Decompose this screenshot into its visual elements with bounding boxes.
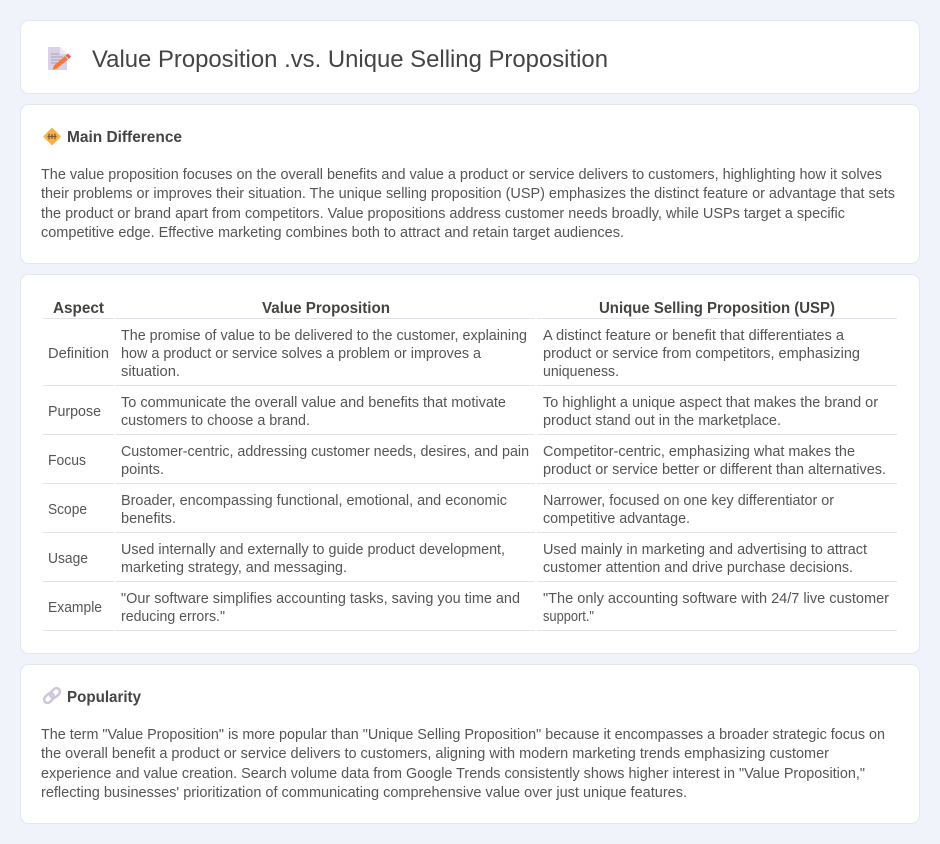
row: scope: Scope bbox=[48, 502, 87, 518]
text block: popularity: experience and value creation. Search volume data from Google Trends consistently shows higher interest in "Value Proposition," bbox=[41, 766, 865, 782]
row: focus: Customer-centric, addressing customer needs, desires, and pain bbox=[121, 444, 529, 460]
row: definition: how a product or service solves a problem or improves a bbox=[121, 346, 481, 362]
row: example: "The only accounting software with 24/7 live customer bbox=[543, 591, 889, 607]
row: focus: product or service better or different than alternatives. bbox=[543, 462, 886, 478]
icon: orange diamond sign bbox=[44, 128, 60, 144]
table header row: Unique Selling Proposition (USP) bbox=[599, 300, 835, 317]
row: scope: Broader, encompassing functional, emotional, and economic bbox=[121, 493, 507, 509]
row: example: support." bbox=[543, 609, 594, 625]
row: usage: marketing strategy, and messaging. bbox=[121, 560, 347, 576]
row: focus bbox=[48, 444, 886, 478]
row: definition: The promise of value to be delivered to the customer, explaining bbox=[121, 328, 527, 344]
text block: main difference bbox=[41, 167, 895, 241]
text block: main difference: The value proposition focuses on the overall benefits and value a product or service delivers to customers, highlighting how it solves bbox=[41, 167, 882, 183]
row: focus: points. bbox=[121, 462, 164, 478]
row: focus: Competitor-centric, emphasizing what makes the bbox=[543, 444, 855, 460]
heading: popularity: Popularity bbox=[67, 689, 141, 706]
row: definition: uniqueness. bbox=[543, 364, 619, 380]
row: purpose: customers to choose a brand. bbox=[121, 413, 310, 429]
table header row bbox=[53, 300, 835, 317]
row: scope: Narrower, focused on one key differentiator or bbox=[543, 493, 834, 509]
icon: chain link bbox=[43, 687, 61, 704]
row: purpose bbox=[48, 395, 878, 429]
title text: Value Proposition .vs. Unique Selling Proposition bbox=[92, 46, 608, 73]
panel: comparison table bbox=[20, 274, 920, 654]
row: definition bbox=[48, 328, 860, 380]
row: usage: Usage bbox=[48, 551, 88, 567]
row: example bbox=[48, 591, 889, 625]
row: definition: Definition bbox=[48, 346, 109, 362]
row: purpose: To highlight a unique aspect that makes the brand or bbox=[543, 395, 878, 411]
row: purpose: product stand out in the marketplace. bbox=[543, 413, 781, 429]
panel: popularity bbox=[20, 664, 920, 824]
row: example: Example bbox=[48, 600, 102, 616]
text block: main difference: their problems or improves their situation. The unique selling proposition (USP) emphasizes the distinct feature or advantage that sets bbox=[41, 186, 895, 202]
row: scope: benefits. bbox=[121, 511, 176, 527]
table header row: Value Proposition bbox=[262, 300, 390, 317]
icon: document with pencil bbox=[48, 47, 71, 70]
row: purpose: To communicate the overall value and benefits that motivate bbox=[121, 395, 506, 411]
row: example: "Our software simplifies accounting tasks, saving you time and bbox=[121, 591, 520, 607]
row: definition: A distinct feature or benefit that differentiates a bbox=[543, 328, 844, 344]
row: example: reducing errors." bbox=[121, 609, 225, 625]
table header row: Aspect bbox=[53, 300, 105, 317]
row: usage bbox=[48, 542, 867, 576]
text block: popularity bbox=[41, 727, 885, 801]
row: scope bbox=[48, 493, 834, 527]
panel: main difference bbox=[20, 104, 920, 264]
heading: main difference: Main Difference bbox=[67, 129, 182, 146]
row: definition: product or service from competitors, emphasizing bbox=[543, 346, 860, 362]
text block: main difference: the product or brand apart from competitors. Value propositions address customer needs broadly, while USPs target a specific bbox=[41, 206, 845, 222]
row: scope: competitive advantage. bbox=[543, 511, 690, 527]
panel: title bbox=[20, 20, 920, 94]
row: usage: Used mainly in marketing and advertising to attract bbox=[543, 542, 867, 558]
row: purpose: Purpose bbox=[48, 404, 101, 420]
table rules bbox=[43, 318, 897, 631]
row: usage: Used internally and externally to guide product development, bbox=[121, 542, 505, 558]
row: usage: customer attention and drive purchase decisions. bbox=[543, 560, 853, 576]
text block: popularity: The term "Value Proposition" is more popular than "Unique Selling Proposition" because it encompasses a broader strategic focus on bbox=[41, 727, 885, 743]
text block: popularity: reflecting businesses' prioritization of communicating comprehensive value over just unique features. bbox=[41, 785, 687, 801]
row: focus: Focus bbox=[48, 453, 86, 469]
row: definition: situation. bbox=[121, 364, 180, 380]
text block: popularity: the overall benefit a product or service delivers to customers, aligning with modern marketing trends emphasizing customer bbox=[41, 746, 829, 762]
text block: main difference: competitive edge. Effective marketing combines both to attract and retain target audiences. bbox=[41, 225, 624, 241]
